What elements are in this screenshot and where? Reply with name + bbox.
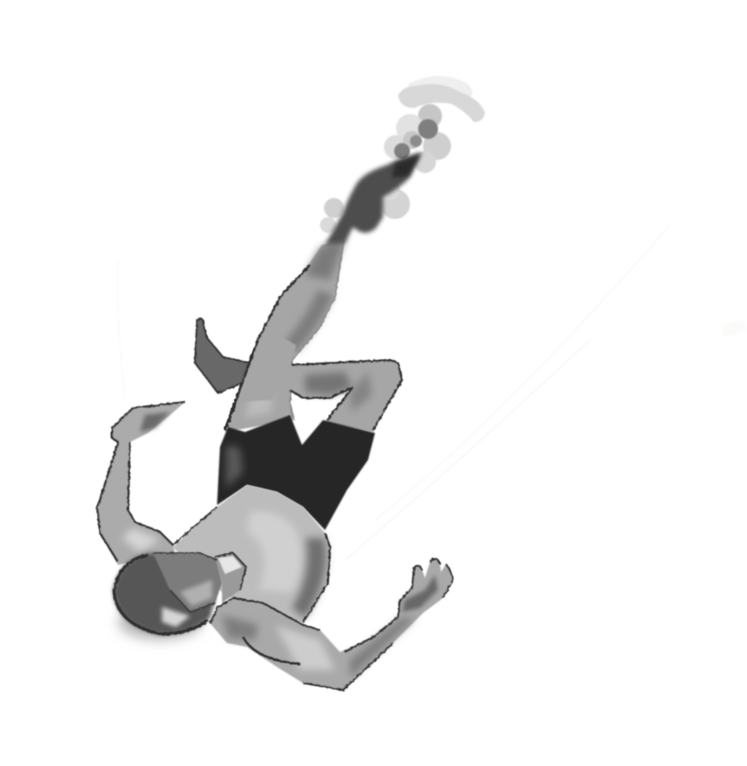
shorts [217, 415, 375, 530]
torso outline [173, 507, 330, 622]
brow line [153, 553, 217, 612]
face [153, 553, 222, 612]
repaint raised leg over the shin [236, 330, 296, 402]
torso highlight [247, 511, 302, 592]
right arm outline [210, 558, 453, 690]
faint motion streaks [118, 225, 745, 560]
torso fill [173, 485, 330, 625]
ear [215, 553, 246, 603]
left arm outline [97, 402, 185, 562]
lower foot [195, 319, 250, 393]
left arm fill [97, 402, 185, 565]
raised leg back outline [290, 242, 343, 417]
raised foot [325, 152, 422, 245]
right arm highlight [275, 625, 335, 670]
bent leg [195, 319, 402, 432]
smoke trail [320, 76, 485, 233]
hair dark rim [114, 555, 208, 634]
face highlight [180, 580, 212, 606]
head shadow [118, 604, 202, 640]
raised leg [225, 238, 345, 432]
right arm shading [222, 615, 415, 678]
ear outline [215, 553, 246, 590]
scalp highlight [162, 607, 190, 627]
armpit line [243, 637, 300, 664]
ear highlight [218, 556, 242, 574]
raised leg fill [225, 240, 345, 432]
torso shading [292, 538, 326, 618]
hand shading [402, 575, 438, 612]
bent leg shading [305, 372, 352, 395]
bent leg outline [290, 360, 402, 430]
raised leg shading [282, 290, 333, 352]
raised leg front line over shin [225, 340, 258, 430]
left arm highlight [122, 528, 160, 552]
left hand shadow [140, 412, 170, 432]
shorts highlight [226, 445, 243, 488]
right arm and hand [210, 558, 453, 690]
bent leg fill [288, 360, 402, 432]
right arm fill [210, 558, 453, 690]
hair [113, 553, 215, 635]
raised leg outline [225, 265, 310, 430]
torso [173, 485, 330, 625]
left arm and hand [97, 402, 185, 565]
head [113, 553, 246, 640]
raised foot dark toes [392, 155, 420, 178]
